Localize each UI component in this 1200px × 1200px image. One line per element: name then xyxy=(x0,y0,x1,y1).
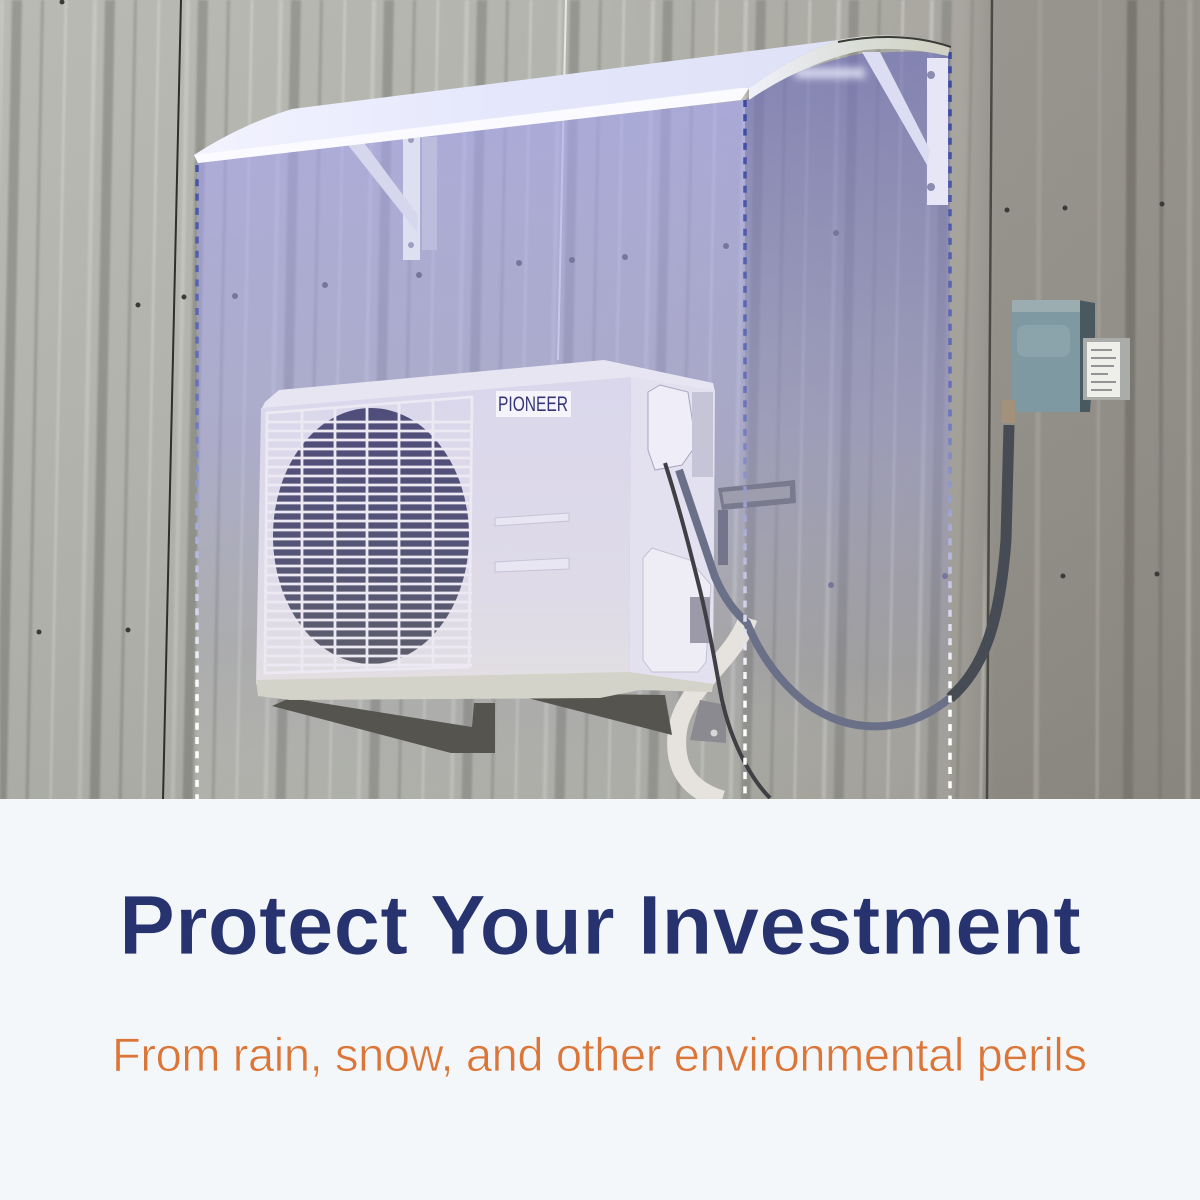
caption panel xyxy=(0,799,1200,1200)
brand label: PIONEER xyxy=(498,393,568,416)
service panel xyxy=(643,548,711,672)
box handle xyxy=(1017,325,1070,357)
canopy top surface xyxy=(194,40,838,163)
wall screws xyxy=(36,0,1164,634)
canopy front edge xyxy=(194,88,749,163)
wiring cover xyxy=(648,385,696,470)
awning canopy xyxy=(194,35,951,163)
unit side panel xyxy=(629,377,715,687)
protected zone: side tinted shade xyxy=(745,51,950,800)
grey flexible conduit: shaded section xyxy=(679,470,950,726)
canopy rear lip xyxy=(838,37,951,47)
white instruction label xyxy=(1087,342,1120,397)
fan guard grille xyxy=(265,397,472,673)
cream drain hose xyxy=(677,618,748,800)
dark flexible conduit: unshaded section xyxy=(950,425,1009,698)
mounting brackets xyxy=(272,693,726,753)
box lid xyxy=(1012,300,1080,313)
unit lid xyxy=(261,360,715,410)
AC outdoor unit xyxy=(256,360,715,700)
panel sticker xyxy=(690,597,710,643)
subtitle: From rain, snow, and other environmental perils xyxy=(112,1028,1087,1081)
unit base tray xyxy=(256,672,713,700)
dashed guide lines xyxy=(197,52,950,800)
under-canopy light glow xyxy=(795,68,865,78)
rating sticker xyxy=(692,392,713,477)
unit front panel xyxy=(256,377,631,684)
photo background: corrugated metal wall xyxy=(0,0,1200,800)
box front xyxy=(1012,312,1080,412)
side wall bracket xyxy=(718,480,796,565)
black refrigerant line xyxy=(665,463,770,798)
brand label xyxy=(496,391,571,417)
clear label holder xyxy=(1083,338,1130,400)
protected zone: front tinted shade xyxy=(197,100,745,800)
fan disc xyxy=(273,408,469,664)
title: Protect Your Investment xyxy=(119,878,1081,972)
canopy front bracket xyxy=(862,52,948,205)
conduit fitting xyxy=(1002,400,1015,423)
shaded wall screws xyxy=(232,230,948,588)
front vents xyxy=(495,513,569,572)
box side xyxy=(1078,300,1095,412)
canopy arched end xyxy=(749,35,950,100)
electrical disconnect box xyxy=(1002,300,1130,423)
canopy rear bracket xyxy=(348,135,437,260)
